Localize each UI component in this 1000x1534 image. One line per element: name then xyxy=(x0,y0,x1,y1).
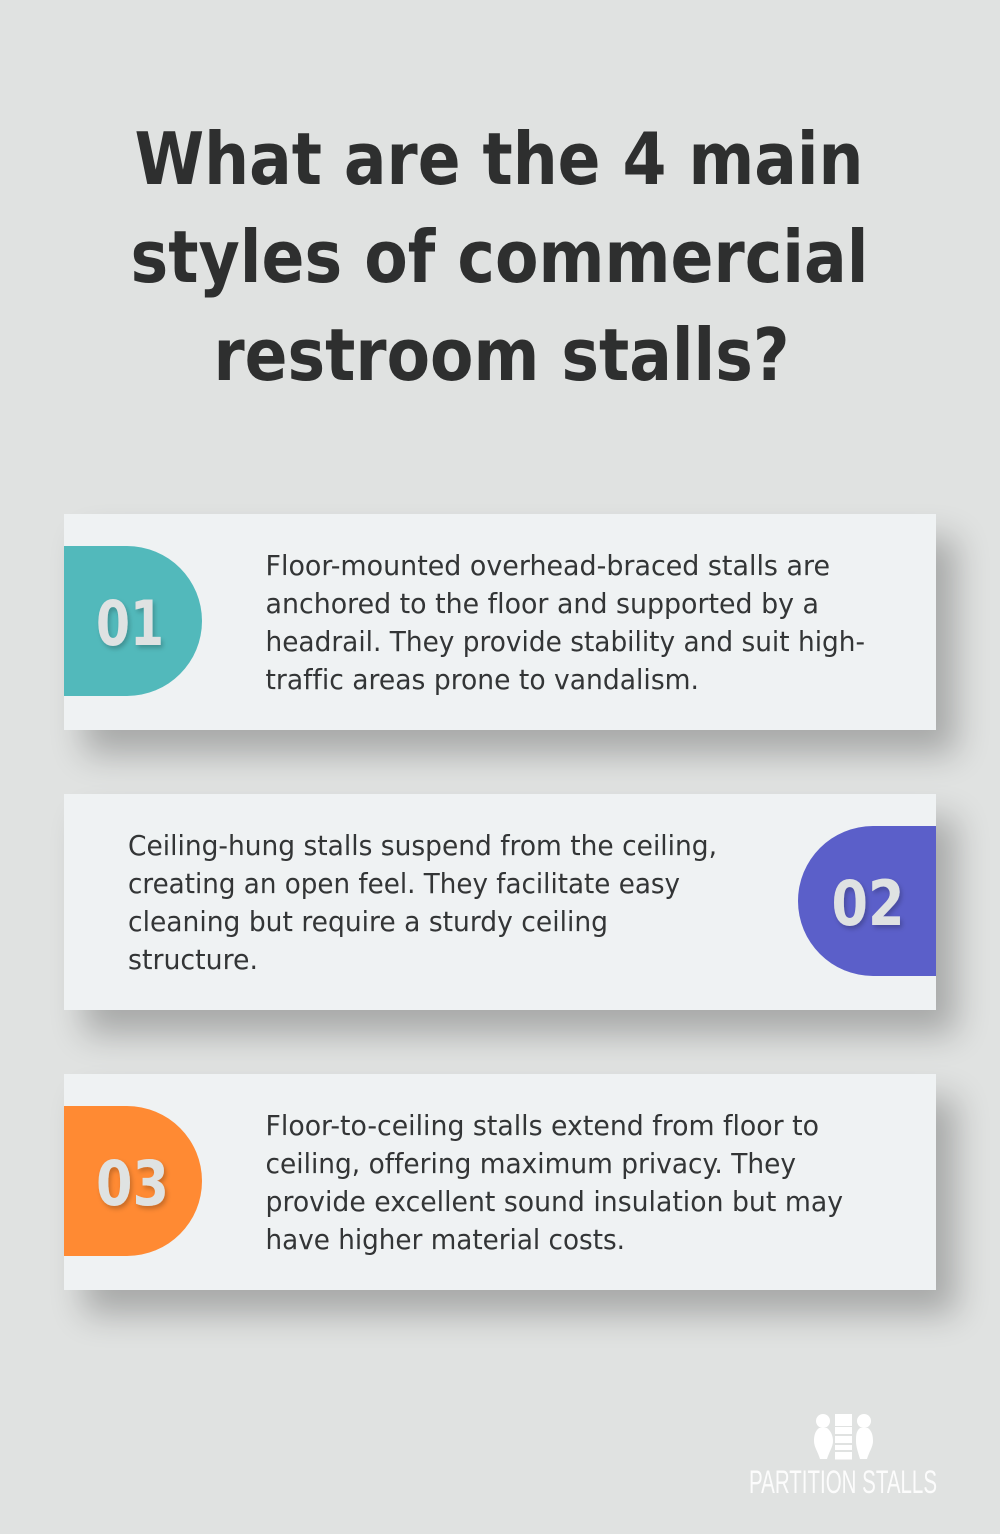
text: step 01 description: traffic areas prone to vandalism. xyxy=(266,663,699,696)
badge: 01: 01 xyxy=(96,587,164,660)
text: step 02 description: structure. xyxy=(128,943,258,976)
text: step 02 description xyxy=(128,829,717,976)
badge: 01 xyxy=(64,546,202,696)
panel: step 03 xyxy=(64,1074,956,1314)
text: step 02 description: cleaning but require a sturdy ceiling xyxy=(128,905,608,938)
text: step 02 description: creating an open feel. They facilitate easy xyxy=(128,867,680,900)
text: step 01 description: anchored to the floor and supported by a xyxy=(266,587,819,620)
text: step 03 description: have higher material costs. xyxy=(266,1223,625,1256)
title: What are the 4 main xyxy=(134,117,864,201)
text: step 03 description xyxy=(266,1109,843,1256)
text: step 03 description: ceiling, offering maximum privacy. They xyxy=(266,1147,796,1180)
badge: 03 xyxy=(64,1106,202,1256)
badge: 03: 03 xyxy=(96,1147,169,1220)
panel: step 02 xyxy=(64,794,956,1034)
text: step 03 description: provide excellent sound insulation but may xyxy=(266,1185,843,1218)
icon: two figures and stall xyxy=(814,1414,873,1460)
badge: 02: 02 xyxy=(832,867,904,940)
logo: Partition Stalls xyxy=(749,1414,937,1500)
title: restroom stalls? xyxy=(214,313,790,397)
text: step 01 description xyxy=(266,549,865,696)
text: step 01 description: headrail. They provide stability and suit high- xyxy=(266,625,865,658)
title: styles of commercial xyxy=(130,215,868,299)
text: step 03 description: Floor-to-ceiling stalls extend from floor to xyxy=(266,1109,819,1142)
text: step 01 description: Floor-mounted overhead-braced stalls are xyxy=(266,549,830,582)
panel: step 01 xyxy=(64,514,956,754)
title xyxy=(130,117,868,397)
text: step 02 description: Ceiling-hung stalls suspend from the ceiling, xyxy=(128,829,717,862)
badge: 02 xyxy=(798,826,936,976)
